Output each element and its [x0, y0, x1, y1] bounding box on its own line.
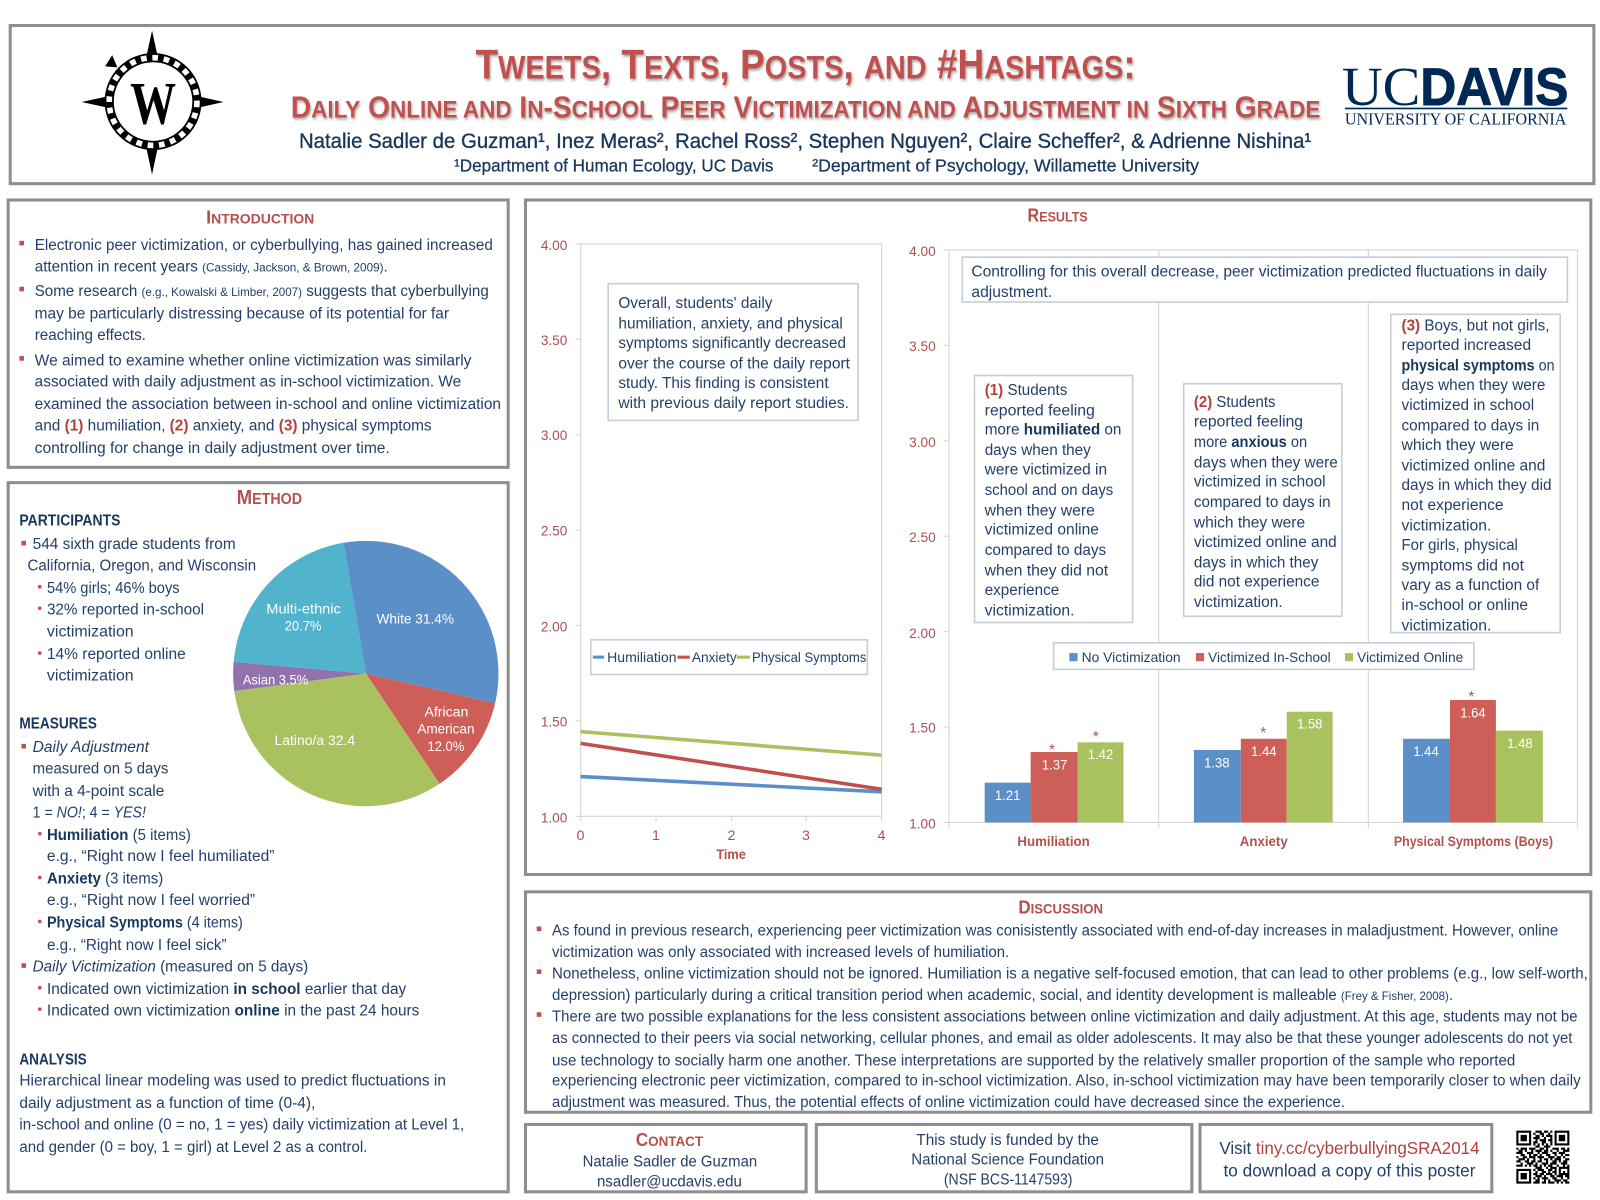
- discussion bullets: As found in previous research, experiencing peer victimization was conisistently associated with end-of-day increases in maladjustment. However, online: [552, 923, 1558, 940]
- introduction bullets: may be particularly distressing because of its potential for far: [35, 305, 449, 322]
- callout: anxiety finding: reported feeling: [1194, 414, 1303, 431]
- bar chart: victimization effects: 3.00: [909, 435, 936, 451]
- heading: introduction: INTRODUCTION: [206, 206, 314, 227]
- panel: results: [526, 200, 1591, 874]
- bars: physical symptoms: [1403, 689, 1543, 822]
- text: participants: 32% reported in-school: [47, 601, 204, 618]
- panel: introduction: [8, 200, 508, 467]
- callout: humiliation finding: [974, 376, 1133, 622]
- callout: controlling note: adjustment.: [971, 284, 1052, 301]
- bars: humiliation: 1.42: [1088, 747, 1113, 762]
- icon: QR code: [1516, 1131, 1569, 1184]
- pie chart: ethnicity: Latino/a 32.4: [274, 733, 355, 748]
- panel: funding: This study is funded by the: [916, 1132, 1099, 1149]
- callout: anxiety finding: victimized online and: [1194, 534, 1337, 551]
- bars: humiliation: 1.37: [1042, 757, 1067, 772]
- callout: physical symptoms finding: For girls, physical: [1402, 537, 1518, 554]
- panel: contact: nsadler@ucdavis.edu: [597, 1174, 742, 1191]
- pie chart: ethnicity: [233, 541, 498, 806]
- text: measures: [19, 716, 420, 1019]
- logo: UC Davis: UC: [1342, 56, 1420, 117]
- text: participants: [19, 513, 256, 685]
- callout: physical symptoms finding: victimization.: [1402, 518, 1491, 535]
- callout: physical symptoms finding: physical symptoms on: [1402, 357, 1555, 374]
- callout: overall decrease: symptoms significantly decreased: [618, 335, 846, 352]
- bar chart: victimization effects: Anxiety: [1240, 834, 1288, 849]
- bars: anxiety: 1.38: [1204, 755, 1230, 770]
- callout: anxiety finding: victimization.: [1194, 594, 1283, 611]
- callout: humiliation finding: experience: [985, 582, 1059, 599]
- pie chart: ethnicity: White 31.4%: [377, 611, 454, 626]
- bars: humiliation: 1.21: [995, 788, 1020, 803]
- text: measures: Indicated own victimization in school earlier that day: [47, 981, 406, 998]
- line chart: change over time: Time: [716, 847, 746, 862]
- line chart: change over time: 3: [802, 828, 810, 844]
- text: participants: PARTICIPANTS: [19, 513, 120, 530]
- callout: anxiety finding: (2) Students: [1194, 394, 1276, 411]
- callout: physical symptoms finding: symptoms did not: [1402, 557, 1525, 574]
- text: participants: 54% girls; 46% boys: [47, 580, 180, 597]
- subtitle: DAILY ONLINE AND IN-SCHOOL PEER VICTIMIZATION AND ADJUSTMENT IN SIXTH GRADE: [291, 90, 1320, 124]
- introduction bullets: examined the association between in-school and online victimization: [35, 396, 501, 413]
- text: participants: California, Oregon, and Wisconsin: [28, 557, 256, 574]
- panel: download link: [1200, 1124, 1492, 1192]
- discussion bullets: experiencing electronic peer victimization, compared to in-school victimization. Also, in-school victimization may have been temporarily closer to when daily: [552, 1073, 1581, 1090]
- line chart: change over time: 4: [878, 828, 886, 844]
- discussion bullets: depression) particularly during a critical transition period when academic, social, and identity development is malleable (Frey & Fisher, 2008).: [552, 987, 1453, 1004]
- text: analysis: ANALYSIS: [19, 1051, 87, 1068]
- logo: UC Davis: DAVIS: [1420, 58, 1568, 117]
- text: measures: MEASURES: [19, 716, 97, 733]
- text: analysis: daily adjustment as a function of time (0-4),: [19, 1095, 315, 1112]
- text: measures: 1 = NO!; 4 = YES!: [33, 804, 147, 821]
- panel: funding: [816, 1124, 1192, 1192]
- callout: humiliation finding: reported feeling: [985, 402, 1095, 419]
- callout: physical symptoms finding: victimization.: [1402, 618, 1491, 635]
- bar chart: victimization effects: 1.50: [909, 721, 936, 737]
- bars: physical symptoms: 1.48: [1507, 736, 1533, 751]
- introduction bullets: We aimed to examine whether online victimization was similarly: [35, 352, 472, 369]
- panel: download link: Visit tiny.cc/cyberbullyingSRA2014: [1219, 1138, 1480, 1158]
- callout: anxiety finding: victimized in school: [1194, 474, 1326, 491]
- legend: line chart: Humiliation: [607, 650, 677, 665]
- bars: anxiety: [1194, 712, 1333, 822]
- heading: method: METHOD: [237, 487, 302, 509]
- text: measures: Physical Symptoms (4 items): [47, 915, 243, 932]
- text: measures: with a 4-point scale: [32, 783, 164, 800]
- introduction bullets: reaching effects.: [35, 327, 146, 344]
- text: analysis: in-school and online (0 = no, 1 = yes) daily victimization at Level 1,: [19, 1117, 464, 1134]
- text: analysis: [19, 1051, 464, 1156]
- text: analysis: and gender (0 = boy, 1 = girl) at Level 2 as a control.: [19, 1139, 367, 1156]
- line chart: change over time: 2.50: [541, 524, 567, 540]
- bars: humiliation: [985, 729, 1123, 822]
- line chart: change over time: 2.00: [541, 620, 567, 636]
- legend: line chart: [591, 640, 867, 674]
- callout: anxiety finding: more anxious on: [1194, 434, 1307, 451]
- discussion bullets: adjustment was measured. Thus, the potential effects of online victimization could have decreased since the experience.: [552, 1094, 1345, 1111]
- text: measures: measured on 5 days: [33, 760, 169, 777]
- line chart: change over time: 0: [577, 828, 585, 844]
- callout: anxiety finding: which they were: [1193, 515, 1305, 532]
- panel: funding: (NSF BCS-1147593): [944, 1172, 1072, 1189]
- callout: humiliation finding: (1) Students: [985, 382, 1068, 399]
- introduction bullets: and (1) humiliation, (2) anxiety, and (3) physical symptoms: [35, 418, 432, 435]
- text: measures: Daily Adjustment: [33, 739, 150, 756]
- icon: compass logo: W: [130, 70, 176, 137]
- panel: method: [8, 483, 508, 1192]
- callout: physical symptoms finding: days in which they did: [1402, 477, 1552, 494]
- line chart: change over time: [541, 238, 886, 862]
- bars: physical symptoms: 1.64: [1460, 705, 1486, 720]
- callout: humiliation finding: when they were: [984, 502, 1095, 519]
- callout: overall decrease: [608, 284, 858, 420]
- callout: overall decrease: humiliation, anxiety, and physical: [618, 316, 843, 333]
- bars: anxiety: 1.44: [1251, 744, 1277, 759]
- logo: UC Davis: UNIVERSITY OF CALIFORNIA: [1345, 109, 1567, 128]
- line chart: change over time: 3.00: [541, 428, 567, 444]
- callout: overall decrease: Overall, students' daily: [618, 295, 773, 312]
- panel: discussion: [526, 892, 1591, 1112]
- bar chart: victimization effects: 1.00: [909, 817, 936, 833]
- panel: contact: [526, 1124, 806, 1192]
- callout: physical symptoms finding: [1391, 314, 1560, 635]
- discussion bullets: as connected to their peers via social networking, cellular phones, and email as older adolescents. It may also be that these younger adolescents do not yet: [552, 1030, 1573, 1047]
- panel: contact: Natalie Sadler de Guzman: [583, 1153, 757, 1170]
- callout: humiliation finding: more humiliated on: [985, 422, 1121, 439]
- heading: discussion: DISCUSSION: [1018, 896, 1103, 917]
- callout: anxiety finding: compared to days in: [1194, 494, 1331, 511]
- pie chart: ethnicity: Asian 3.5%: [243, 673, 308, 688]
- callout: anxiety finding: did not experience: [1194, 574, 1319, 591]
- bar chart: victimization effects: 2.50: [909, 530, 936, 546]
- introduction bullets: [19, 237, 501, 457]
- panel: header: [10, 26, 1594, 184]
- callout: humiliation finding: victimized online: [985, 522, 1099, 539]
- legend: bar chart: Victimized Online: [1357, 650, 1464, 665]
- bar chart: victimization effects: Physical Symptoms (Boys): [1394, 834, 1553, 849]
- callout: overall decrease: over the course of the daily report: [618, 355, 851, 372]
- callout: anxiety finding: days when they were: [1194, 454, 1338, 471]
- pie chart: ethnicity: 12.0%: [428, 739, 464, 754]
- bar chart: victimization effects: 2.00: [909, 626, 936, 642]
- callout: physical symptoms finding: reported increased: [1402, 337, 1531, 354]
- pie chart: ethnicity: American: [417, 722, 474, 737]
- bars: humiliation: *: [1049, 742, 1055, 759]
- bars: humiliation: *: [1093, 729, 1099, 746]
- pie chart: ethnicity: Multi-ethnic: [266, 601, 341, 616]
- authors: Natalie Sadler de Guzman¹, Inez Meras², Rachel Ross², Stephen Nguyen², Claire Scheffer², & Adrienne Nishina¹: [299, 129, 1311, 153]
- line chart: change over time: 1.50: [541, 715, 567, 731]
- callout: controlling note: [962, 257, 1567, 302]
- text: measures: e.g., “Right now I feel worried”: [47, 892, 255, 909]
- callout: humiliation finding: compared to days: [985, 542, 1106, 559]
- callout: physical symptoms finding: victimized online and: [1402, 457, 1545, 474]
- line chart: change over time: 3.50: [541, 333, 567, 349]
- panel: funding: National Science Foundation: [911, 1151, 1104, 1168]
- icon: compass logo: [82, 31, 223, 174]
- callout: humiliation finding: days when they: [985, 442, 1091, 459]
- text: participants: 544 sixth grade students from: [33, 536, 236, 553]
- callout: overall decrease: with previous daily report studies.: [617, 395, 849, 412]
- text: measures: Daily Victimization (measured on 5 days): [33, 958, 308, 975]
- discussion bullets: victimization was only associated with increased levels of humiliation.: [552, 944, 1009, 961]
- legend: line chart: Anxiety: [692, 650, 737, 665]
- text: participants: victimization: [47, 624, 134, 641]
- text: measures: Anxiety (3 items): [47, 871, 163, 888]
- bar chart: victimization effects: Humiliation: [1017, 834, 1090, 849]
- text: measures: e.g., “Right now I feel sick”: [47, 937, 227, 954]
- introduction bullets: attention in recent years (Cassidy, Jackson, & Brown, 2009).: [35, 258, 388, 275]
- callout: physical symptoms finding: which they were: [1401, 437, 1514, 454]
- bars: anxiety: 1.58: [1297, 717, 1323, 732]
- introduction bullets: associated with daily adjustment as in-school victimization. We: [35, 374, 461, 391]
- callout: overall decrease: study. This finding is consistent: [618, 375, 829, 392]
- text: measures: e.g., “Right now I feel humiliated”: [47, 848, 274, 865]
- callout: humiliation finding: school and on days: [985, 482, 1114, 499]
- legend: line chart: Physical Symptoms: [752, 650, 866, 665]
- legend: bar chart: Victimized In-School: [1208, 650, 1331, 665]
- text: measures: Humiliation (5 items): [47, 827, 191, 844]
- legend: bar chart: [1054, 643, 1474, 669]
- bar chart: victimization effects: 3.50: [909, 339, 936, 355]
- callout: humiliation finding: victimization.: [985, 602, 1074, 619]
- text: participants: victimization: [47, 668, 134, 685]
- bar chart: victimization effects: 4.00: [909, 244, 936, 260]
- introduction bullets: Some research (e.g., Kowalski & Limber, 2007) suggests that cyberbullying: [35, 283, 489, 300]
- text: measures: Indicated own victimization online in the past 24 hours: [47, 1002, 420, 1019]
- logo: UC Davis: [1342, 56, 1568, 128]
- callout: humiliation finding: were victimized in: [984, 461, 1107, 478]
- legend: bar chart: No Victimization: [1082, 650, 1181, 665]
- callout: controlling note: Controlling for this overall decrease, peer victimization predicted fluctuations in daily: [971, 264, 1547, 281]
- callout: physical symptoms finding: not experience: [1402, 497, 1504, 514]
- line chart: change over time: 2: [728, 828, 736, 844]
- discussion bullets: Nonetheless, online victimization should not be ignored. Humiliation is a negative self-focused emotion, that can lead to other problems (e.g., low self-worth,: [552, 966, 1588, 983]
- introduction bullets: controlling for change in daily adjustment over time.: [35, 440, 390, 457]
- line chart: change over time: 1.00: [541, 810, 567, 826]
- callout: anxiety finding: [1184, 384, 1342, 616]
- callout: physical symptoms finding: (3) Boys, but not girls,: [1402, 318, 1549, 335]
- panel: download link: to download a copy of this poster: [1223, 1161, 1476, 1181]
- introduction bullets: Electronic peer victimization, or cyberbullying, has gained increased: [35, 237, 493, 254]
- bars: anxiety: *: [1260, 725, 1266, 742]
- pie chart: ethnicity: 20.7%: [285, 619, 321, 634]
- affiliation 2: ²Department of Psychology, Willamette University: [812, 155, 1199, 175]
- discussion bullets: use technology to socially harm one another. These interpretations are supported by the relatively smaller proportion of the sample who reported: [552, 1052, 1515, 1069]
- callout: physical symptoms finding: days when they were: [1402, 377, 1545, 394]
- callout: physical symptoms finding: victimized in school: [1402, 397, 1534, 414]
- text: analysis: Hierarchical linear modeling was used to predict fluctuations in: [19, 1073, 446, 1090]
- callout: anxiety finding: days in which they: [1194, 554, 1319, 571]
- callout: physical symptoms finding: vary as a function of: [1402, 577, 1540, 594]
- callout: physical symptoms finding: compared to days in: [1402, 418, 1539, 435]
- panel: contact: CONTACT: [636, 1129, 703, 1150]
- bars: physical symptoms: *: [1468, 689, 1474, 706]
- line chart: change over time: 1: [652, 828, 660, 844]
- title: TWEETS, TEXTS, POSTS, AND #HASHTAGS:: [476, 41, 1136, 88]
- heading: results: RESULTS: [1028, 204, 1088, 225]
- discussion bullets: There are two possible explanations for the less consistent associations between online victimization and daily adjustment. At this age, students may not be: [552, 1008, 1578, 1025]
- affiliation 1: ¹Department of Human Ecology, UC Davis: [454, 155, 774, 175]
- bar chart: victimization effects: [909, 244, 1578, 849]
- line chart: change over time: 4.00: [541, 238, 567, 254]
- callout: humiliation finding: when they did not: [984, 563, 1109, 580]
- bars: physical symptoms: 1.44: [1413, 744, 1439, 759]
- callout: physical symptoms finding: in-school or online: [1402, 597, 1528, 614]
- text: participants: 14% reported online: [47, 646, 186, 663]
- pie chart: ethnicity: African: [424, 704, 468, 719]
- discussion bullets: [537, 923, 1588, 1111]
